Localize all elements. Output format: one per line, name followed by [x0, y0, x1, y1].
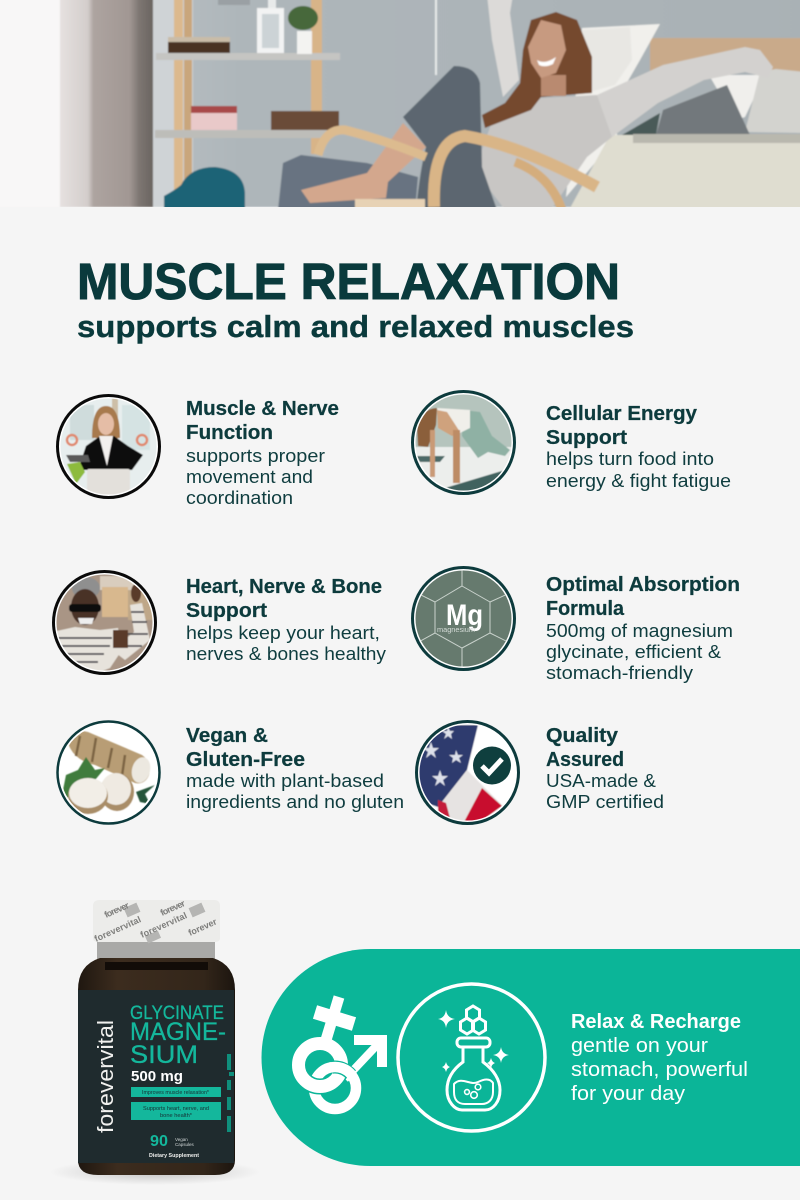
panel: relax and recharge	[262, 949, 800, 1166]
text: optimal absorption formula: Optimal Absorption	[546, 574, 740, 596]
product bottle	[50, 898, 260, 1185]
product bottle: Dietary Supplement	[149, 1153, 199, 1159]
product bottle: 500 mg	[131, 1068, 183, 1085]
icon: smiling older woman	[52, 570, 158, 680]
text: heart, nerve and bone support: helps keep your heart,	[186, 623, 380, 643]
text: heart, nerve and bone support: Heart, Nerve & Bone	[186, 576, 382, 598]
product bottle: Improves muscle relaxation*	[142, 1090, 210, 1096]
product bottle: forever	[187, 916, 219, 938]
product bottle: forever	[159, 898, 187, 918]
callout text: gentle on your	[571, 1035, 708, 1057]
product bottle: 90	[150, 1133, 168, 1150]
text: quality assured: USA-made &	[546, 771, 656, 791]
text: quality assured: Assured	[546, 749, 624, 771]
text: optimal absorption formula: stomach-friendly	[546, 663, 693, 683]
text: cellular energy support: Support	[546, 427, 627, 449]
callout text: for your day	[571, 1083, 685, 1105]
text: optimal absorption formula: Formula	[546, 598, 625, 620]
subtitle: supports calm and relaxed muscles	[77, 309, 634, 344]
icon: magnesium element hexagon: Mg	[446, 599, 483, 632]
product bottle: Vegan	[175, 1137, 188, 1142]
text: cellular energy support	[546, 403, 731, 491]
text: vegan and gluten-free: Vegan &	[186, 725, 268, 747]
icon: american flag with check badge	[415, 720, 521, 826]
text: muscle and nerve function: Muscle & Nerve	[186, 398, 339, 420]
text: muscle and nerve function: supports proper	[186, 446, 325, 466]
product bottle: bone health*	[160, 1113, 193, 1119]
product bottle: forevervital	[139, 910, 188, 940]
hero photo: woman relaxing in a chair	[0, 0, 800, 210]
icon: magnesium element hexagon: magnesium	[437, 625, 475, 634]
text: quality assured: GMP certified	[546, 792, 664, 812]
callout text: Relax & Recharge	[571, 1011, 741, 1033]
text: cellular energy support: Cellular Energy	[546, 403, 698, 425]
product bottle: GLYCINATE	[130, 1003, 224, 1024]
text: vegan and gluten-free	[186, 725, 404, 812]
icon: konjac root and leaves	[58, 722, 160, 824]
icon: intertwined gender symbols	[298, 997, 387, 1109]
text: heart, nerve and bone support: nerves & bones healthy	[186, 644, 386, 664]
callout text	[571, 1011, 748, 1105]
text: heart, nerve and bone support	[186, 576, 386, 664]
text: optimal absorption formula: glycinate, efficient &	[546, 642, 721, 662]
text: muscle and nerve function: movement and	[186, 467, 313, 487]
product bottle: SIUM	[130, 1041, 198, 1069]
text: muscle and nerve function: Function	[186, 422, 273, 444]
text: quality assured: Quality	[546, 725, 619, 747]
text: cellular energy support: energy & fight fatigue	[546, 471, 731, 491]
title: MUSCLE RELAXATION	[77, 253, 620, 310]
text: optimal absorption formula	[546, 574, 740, 683]
product bottle: Supports heart, nerve, and	[143, 1106, 209, 1112]
product bottle: MAGNE-	[130, 1018, 226, 1046]
icon: magnesium element hexagon	[412, 568, 514, 670]
icon: woman in yoga pose	[411, 390, 517, 496]
heading block	[77, 253, 634, 344]
text: cellular energy support: helps turn food into	[546, 449, 714, 469]
text: vegan and gluten-free: made with plant-based	[186, 771, 384, 791]
text: muscle and nerve function	[186, 398, 339, 508]
icon: woman meditating at laptop	[56, 394, 162, 500]
text: vegan and gluten-free: ingredients and no gluten	[186, 792, 404, 812]
text: heart, nerve and bone support: Support	[186, 600, 267, 622]
text: optimal absorption formula: 500mg of magnesium	[546, 621, 733, 641]
text: vegan and gluten-free: Gluten-Free	[186, 749, 305, 771]
product bottle: Capsules	[175, 1142, 195, 1147]
icon: flask with molecule	[398, 984, 545, 1131]
callout text: stomach, powerful	[571, 1059, 748, 1081]
product bottle: forever	[103, 900, 131, 920]
product bottle: forevervital	[93, 914, 142, 944]
text: muscle and nerve function: coordination	[186, 488, 293, 508]
product bottle: forevervital	[93, 1020, 118, 1133]
text: quality assured	[546, 725, 664, 812]
